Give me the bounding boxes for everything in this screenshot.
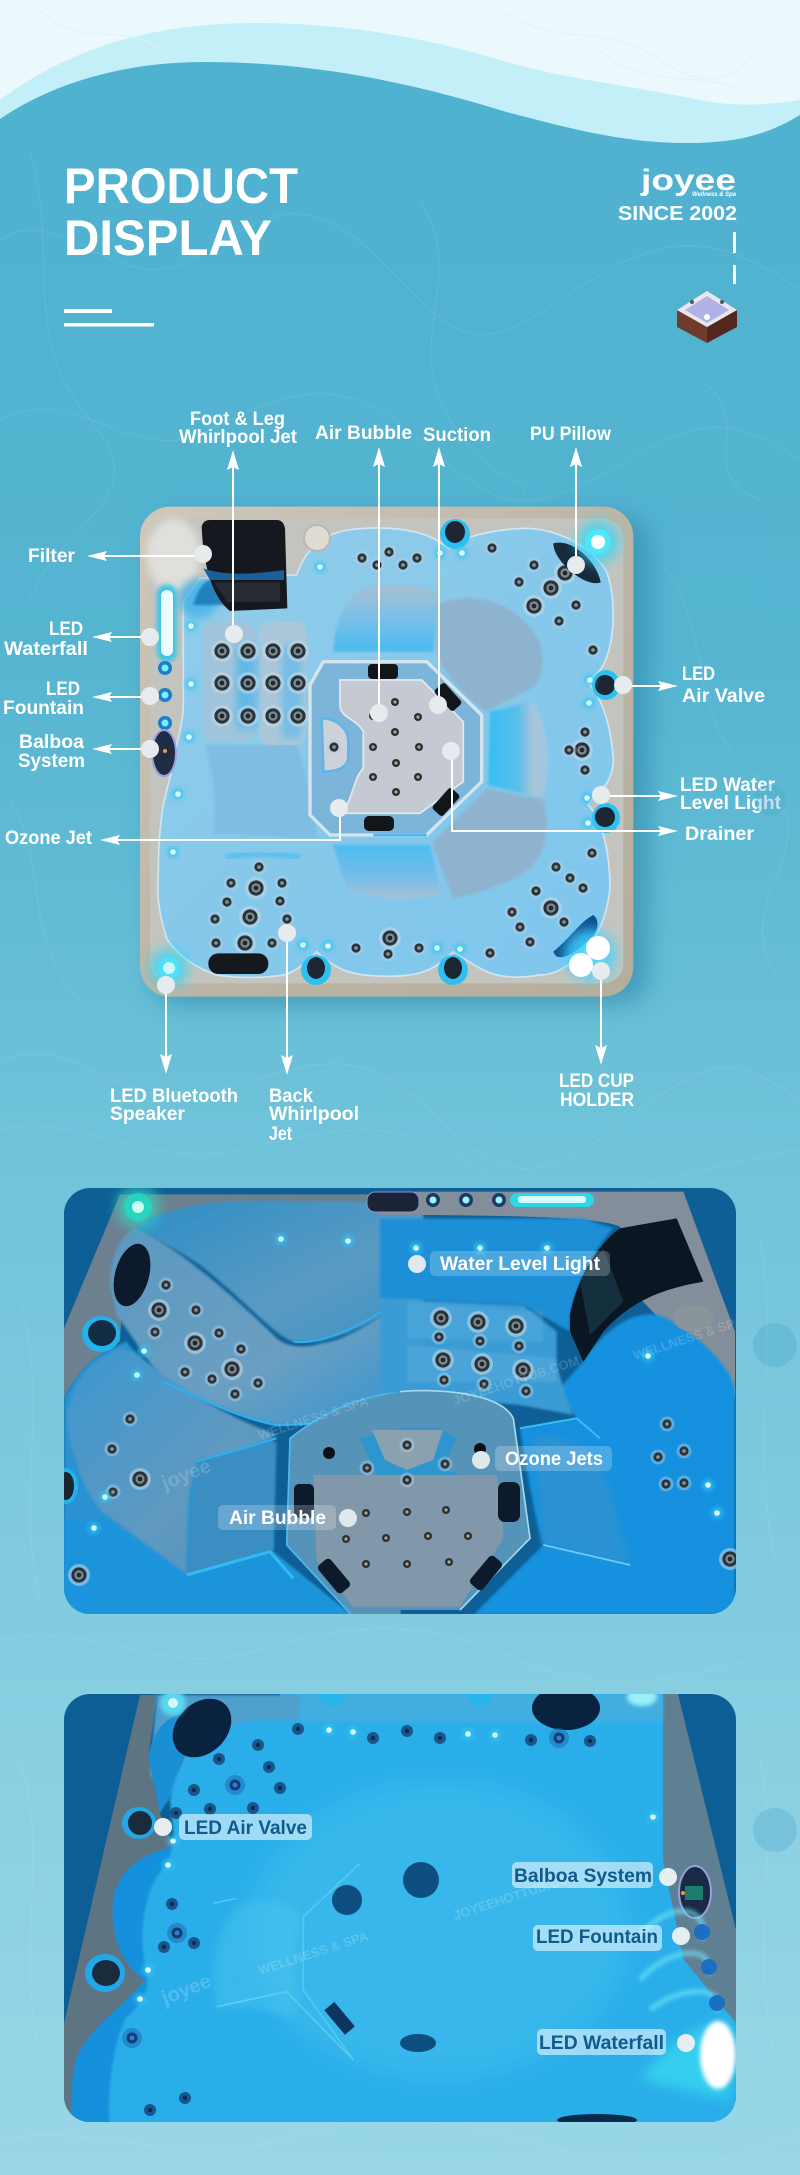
title: DISPLAY (64, 210, 272, 266)
center basin (310, 662, 482, 835)
callout: balboa system: System (18, 751, 85, 772)
water right (280, 1694, 736, 2122)
callout: air bubble photo (218, 1505, 357, 1530)
watermark drops (753, 784, 797, 1852)
callout: led air valve photo: LED Air Valve (184, 1818, 307, 1839)
callout: led air valve (614, 664, 765, 707)
icon: hot tub isometric (677, 291, 737, 343)
callout: back whirlpool jet: Back (269, 1086, 313, 1107)
pu pillows (193, 520, 601, 974)
since 2002: SINCE 2002 (618, 203, 737, 225)
callout: drainer (442, 742, 755, 845)
seat recesses (178, 578, 548, 898)
callout: suction: Suction (423, 425, 491, 446)
right half of photo (380, 1192, 735, 1615)
black pillows and cushions (107, 1240, 520, 1595)
callout: pu pillow: PU Pillow (530, 424, 611, 445)
callout: led waterfall: Waterfall (4, 639, 88, 660)
basin cushions (364, 664, 463, 831)
left half of photo (64, 1194, 423, 1617)
title (64, 158, 298, 266)
title: PRODUCT (64, 158, 298, 214)
top deck right of centre (300, 1694, 663, 1722)
jets: seats (208, 540, 600, 962)
callout: filter (28, 545, 212, 567)
callout: pu pillow (530, 424, 611, 574)
right deck wedge (663, 1694, 736, 2030)
callout: led waterfall photo (537, 2029, 695, 2055)
callout: foot and leg whirlpool jet: Whirlpool Jet (179, 427, 298, 448)
jets (122, 1723, 596, 2116)
title underline bars (64, 309, 154, 326)
callout: balboa system photo: Balboa System (514, 1866, 652, 1887)
brand logo: Wellness & Spa (692, 192, 737, 198)
watermarks: joyee (158, 1970, 214, 2010)
header wave (0, 0, 800, 143)
led fountains (640, 1911, 725, 2012)
callout: back whirlpool jet (269, 924, 359, 1145)
callout: led air valve: Air Valve (682, 686, 765, 707)
callout: led fountain (3, 679, 159, 719)
callout: ozone jet: Ozone Jet (5, 828, 93, 849)
right black pillow (570, 1218, 703, 1362)
watermarks: WELLNESS & SPA (256, 1928, 371, 1978)
led fountains and balboa panel (152, 661, 176, 776)
callout: filter: Filter (28, 546, 76, 567)
callout: suction (423, 425, 491, 714)
watermarks: WELLNESS & SPA (631, 1313, 746, 1363)
dashes (733, 232, 736, 284)
led dots (134, 1724, 659, 2005)
callout: air bubble (315, 423, 412, 722)
callout: water level light (408, 1251, 610, 1276)
callout: water level light: Water Level Light (440, 1254, 601, 1275)
callout: led air valve: LED (682, 664, 715, 685)
callout: air bubble photo: Air Bubble (229, 1508, 326, 1529)
watermarks: joyee (158, 1455, 214, 1495)
callout: balboa system (18, 732, 159, 772)
foot rest pads (203, 622, 307, 745)
panel: main tub top view (140, 507, 650, 1005)
callout: led fountain photo: LED Fountain (536, 1927, 658, 1948)
callout: led waterfall: LED (49, 619, 83, 640)
tub body drawn in crop coordinates (140, 507, 633, 997)
watermarks (158, 1313, 746, 1495)
callout: ozone jets (472, 1446, 612, 1471)
callout: led bluetooth speaker: LED Bluetooth (110, 1086, 238, 1107)
callout: back whirlpool jet: Jet (269, 1124, 293, 1145)
basin wedge (372, 1430, 443, 1470)
callout: led cup holder (559, 962, 634, 1111)
callout: balboa system: Balboa (19, 732, 84, 753)
left half (64, 1695, 433, 2130)
callout: balboa system photo (512, 1862, 677, 1888)
tub shadow (150, 515, 650, 1005)
callout: ozone jets: Ozone Jets (505, 1449, 603, 1470)
jets: floor (326, 698, 423, 796)
led dots (167, 547, 596, 955)
callout: led fountain: Fountain (3, 698, 84, 719)
jets: seats and foot block (68, 1278, 741, 1586)
jets: foot and leg (211, 640, 309, 727)
shell (158, 528, 613, 977)
led waterfall glow (640, 2020, 736, 2100)
callout: foot and leg whirlpool jet (179, 409, 298, 643)
valves (64, 1316, 120, 1504)
air valves (301, 519, 620, 985)
filter lid (304, 525, 330, 551)
cup holders (149, 520, 620, 988)
callout: led water level light (592, 775, 782, 814)
watermarks: JOYEEHOTTUB.COM (451, 1868, 581, 1923)
callout: back whirlpool jet: Whirlpool (269, 1104, 359, 1125)
callout: led fountain photo (533, 1925, 690, 1951)
callout: led water level light: LED Water (680, 775, 776, 796)
panel: photo with water (64, 1686, 736, 2130)
panel: photo front view (54, 1185, 746, 1617)
callout: led cup holder: LED CUP (559, 1071, 634, 1092)
pillows and dark spots (161, 1686, 637, 2126)
callout: led cup holder: HOLDER (560, 1090, 634, 1111)
valves and lights (85, 1688, 657, 1992)
callout: led waterfall photo: LED Waterfall (539, 2033, 664, 2054)
callout: drainer: Drainer (685, 824, 755, 845)
top rim lights and panel (116, 1185, 594, 1229)
watermarks: JOYEEHOTTUB.COM (451, 1353, 581, 1408)
callout: ozone jet (5, 799, 348, 849)
center water glow (250, 1780, 630, 2080)
callout: led fountain: LED (46, 679, 80, 700)
deck (140, 507, 633, 997)
led dots (88, 1233, 723, 1534)
watermarks (158, 1868, 581, 2010)
balboa panel (679, 1866, 711, 1918)
watermarks: WELLNESS & SPA (256, 1393, 371, 1443)
callout: led bluetooth speaker: Speaker (110, 1104, 186, 1125)
callout: led bluetooth speaker (110, 976, 238, 1125)
callout: led waterfall (4, 619, 159, 660)
callout: led water level light: Level Light (680, 793, 782, 814)
callout: led air valve photo (154, 1814, 312, 1840)
callout: air bubble: Air Bubble (315, 423, 412, 444)
led waterfall strip (157, 584, 177, 662)
callout: foot and leg whirlpool jet: Foot & Leg (190, 409, 285, 430)
brand logo: joyee (640, 164, 736, 197)
